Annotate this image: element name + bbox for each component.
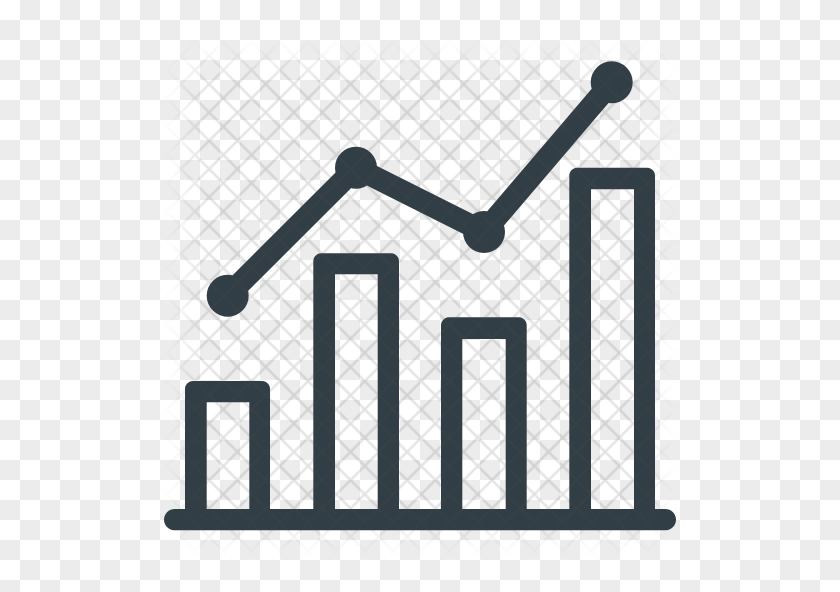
icon: bar chart with trend line [164, 61, 676, 530]
data point 2 [335, 147, 377, 189]
diagonal lattice watermark [178, 54, 662, 542]
bar 1 [185, 381, 270, 514]
bar 4 [569, 168, 655, 514]
baseline axis [164, 509, 676, 530]
trend line [228, 82, 612, 296]
bar 2 [313, 253, 399, 514]
data point 4 [591, 61, 633, 103]
data point 3 [463, 211, 505, 253]
data point 1 [207, 275, 249, 317]
bar 3 [441, 317, 527, 514]
